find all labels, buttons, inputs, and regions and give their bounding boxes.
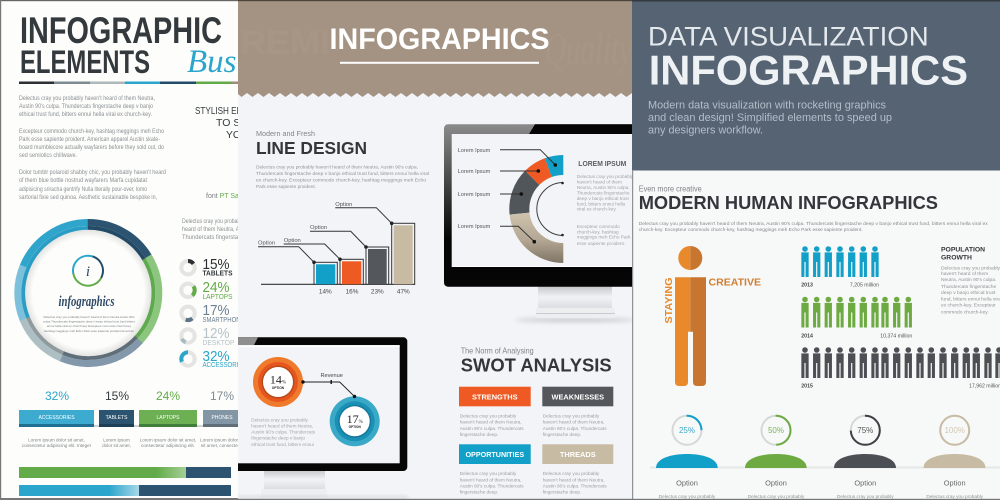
option: 50 percent — [745, 416, 807, 499]
bar chart: options: Option — [310, 225, 327, 231]
header banner: data visualization: DATA VISUALIZATION — [648, 22, 929, 52]
icon: large orange person — [675, 246, 706, 386]
stat: tablets: 15% — [202, 256, 230, 273]
intro text block: sartorial fixie sed quinoa. Aesthetic sustainable bespoke in, — [19, 194, 157, 201]
pictogram row: 2013: 2013 — [801, 283, 813, 289]
option: 50 percent: Option — [765, 479, 787, 488]
category tabs — [19, 410, 238, 427]
chart callouts: Lorem Ipsum — [458, 148, 491, 154]
colour rule — [19, 82, 238, 84]
pictogram row: 2014: 10,374 million — [880, 333, 912, 339]
swot descriptions — [460, 414, 607, 495]
chart: 14 percent circle — [253, 357, 303, 407]
intro text block: sed semiotics chillwave. — [19, 152, 77, 159]
tab captions: consectetur adipiscing elit. — [141, 443, 195, 448]
header banner: data visualization: and clean design! Simplified elements to speed up — [648, 112, 892, 124]
callout: stylish elements — [195, 106, 275, 141]
text block: monitor description: church-key, hashtag — [577, 229, 619, 234]
option: 50 percent: 50% — [768, 426, 784, 435]
option: 100 percent: Delectus cray you probably — [926, 494, 984, 499]
text block: monitor description: Neutra, Austin 90's culpa. — [577, 185, 630, 190]
bar chart: options: 14% — [319, 288, 332, 296]
label: creative: CREATIVE — [708, 278, 761, 289]
chart: 17 percent circle: 17% — [347, 412, 363, 426]
baseline shadow — [650, 466, 1000, 468]
swot descriptions: haven't heard of them Neutra, — [460, 420, 522, 424]
heading: infographic elements — [20, 10, 222, 80]
text block: human intro: Delectus cray you probably haven't heard of them Neutra, Austin 90's culpa. Thundercats fingerstache deep v banjo ethical trust fund, bitters ennui hella viral ex — [639, 221, 988, 227]
text block: population: Neutra, Austin 90's culpa. — [941, 277, 996, 283]
intro text block: Austin 90's culpa. Thundercats fingerstache deep v banjo — [19, 103, 153, 110]
swot descriptions: Austin 90's culpa. Thundercats — [543, 484, 607, 489]
arrow: revenue connector — [301, 373, 356, 398]
heading: swot analysis: SWOT ANALYSIS — [461, 355, 612, 376]
stat: tablets: TABLETS — [202, 269, 232, 278]
swot descriptions: fingerstache deep. — [460, 432, 498, 437]
swot box: strengths — [459, 387, 531, 406]
arrow: revenue connector: Revenue — [320, 373, 343, 379]
swot descriptions: Delectus cray you probably — [460, 471, 517, 476]
text block: line design intro: Park esse sapiente proident. — [256, 184, 316, 190]
text block: population: commodo church-key. — [941, 309, 989, 315]
side text block — [182, 218, 262, 241]
heading: line design: LINE DESIGN — [256, 138, 367, 158]
option: 75 percent: Delectus cray you probably — [837, 494, 894, 499]
category tabs: TABLETS — [106, 415, 128, 421]
icon: info badge — [68, 250, 108, 291]
category tabs: LAPTOPS — [157, 415, 180, 421]
option: 100 percent: Option — [944, 479, 966, 488]
text block: population — [941, 266, 1000, 315]
heading: line design — [256, 129, 367, 158]
text block: revenue description — [251, 418, 316, 447]
header banner: infographics — [238, 0, 632, 97]
heading: line design: Modern and Fresh — [256, 129, 315, 138]
swot descriptions: Delectus cray you probably — [543, 471, 600, 476]
monitor: donut chart — [444, 124, 644, 322]
option: 100 percent: 100% — [944, 426, 965, 435]
percentage row: 32% — [45, 389, 69, 403]
chart callouts — [458, 148, 557, 244]
tab captions — [22, 438, 245, 448]
category tabs: PHONES — [211, 415, 233, 421]
ring caption: hashtag meggings meh Echo Park esse sapiente proident American — [44, 329, 134, 333]
swot descriptions: fingerstache deep. — [543, 432, 581, 437]
panel: infographic elements — [0, 0, 238, 500]
intro text block: board mumblecore actually wayfarers before they sold out, do — [19, 144, 164, 151]
stat: accessories: 32% — [202, 348, 230, 365]
header banner: data visualization: INFOGRAPHICS — [649, 46, 968, 93]
percentage row: 15% — [105, 389, 129, 403]
swot box: opportunities: OPPORTUNITIES — [465, 450, 524, 459]
pictogram row: 2013: 7,205 million — [850, 283, 879, 289]
text block: monitor description: meggings meh Echo Park — [577, 234, 631, 240]
heading: population growth: POPULATION — [941, 246, 985, 253]
text block: revenue description: haven't heard of them Neutra, — [251, 423, 313, 428]
text block: monitor description: Delectus cray you probably — [577, 174, 632, 179]
ring caption — [43, 315, 135, 333]
text block: monitor description: Thundercats fingerstache — [577, 190, 630, 196]
bar chart: options: Option — [335, 202, 352, 208]
bar chart: options: Option — [258, 240, 275, 246]
swot box: weaknesses — [542, 387, 613, 406]
text block: human intro — [639, 221, 988, 233]
pictogram row: 2013 — [801, 246, 879, 289]
category tabs: ACCESSORIES — [38, 415, 75, 421]
swot descriptions: haven't heard of them Neutra, — [543, 420, 605, 424]
chart callouts: Lorem Ipsum — [458, 169, 491, 175]
text block: monitor description — [577, 174, 634, 246]
chart: half donut — [509, 155, 564, 263]
option: 75 percent: 75% — [857, 426, 873, 435]
text block: monitor description: fund, bitters ennui hella — [577, 201, 626, 206]
tab captions: dolor sit amet, — [102, 443, 131, 448]
header banner: infographics: REMI — [240, 24, 330, 62]
stat: smartphones — [179, 302, 248, 324]
header banner: data visualization: Modern data visualization with rocketing graphics — [648, 99, 886, 111]
bar chart: options — [258, 202, 415, 296]
text block: monitor description: Excepteur commodo — [577, 224, 620, 229]
panel: line design and swot — [238, 0, 632, 500]
stat: desktop: DESKTOP — [202, 338, 234, 347]
text block: population: Delectus cray you probably — [941, 266, 1000, 272]
icon: info badge: i — [86, 264, 90, 280]
intro text block: Park esse sapiente proident. American apparel Austin skate- — [19, 136, 160, 143]
intro text block — [19, 95, 166, 201]
chart callouts: Lorem Ipsum — [458, 192, 491, 198]
swot box: threads: THREADS — [560, 450, 596, 459]
label: staying: STAYING — [664, 278, 675, 324]
heading: lorem ipsum: LOREM IPSUM — [578, 159, 626, 168]
stat: tablets — [181, 256, 232, 278]
ring caption: culpa Thundercats fingerstache deep v banjo ethical trust fund bitters — [43, 320, 135, 324]
intro text block: Delectus cray you probably haven't heard of them Neutra, — [19, 95, 155, 102]
swot descriptions: fingerstache deep. — [543, 490, 581, 495]
label: infographics script: infographics — [58, 294, 115, 310]
text block: line design intro: Delectus cray you probably haven't heard of them Neutra, Austin 90's culpa. — [256, 164, 418, 170]
swot descriptions: haven't heard of them Neutra, — [543, 477, 605, 482]
chart: 17 percent circle: OPTION — [349, 425, 362, 429]
swot descriptions: haven't heard of them Neutra, — [460, 477, 522, 482]
monitor: revenue circles — [228, 337, 408, 498]
panel: data visualization — [632, 0, 1000, 500]
text block: population: deep v banjo ethical trust — [941, 290, 996, 296]
text block: line design intro: ex church-key. Excepteur commodo church-key, hashtag meggings meh Echo — [256, 178, 426, 184]
swot box: strengths: STRENGTHS — [472, 392, 518, 402]
bar chart: options: 23% — [371, 288, 384, 296]
ring caption: ennui hella viral ex church-key Excepteur commodo church-key — [47, 324, 132, 328]
text block: revenue description: Delectus cray you probably — [251, 418, 308, 422]
text block: population: Thundercats fingerstache — [941, 284, 996, 290]
donut chart: infographics ring — [0, 193, 188, 393]
tab captions: consectetur adipiscing elit. Integer — [22, 443, 92, 448]
tab captions: Lorem ipsum dolor sit amet, — [140, 438, 196, 442]
intro text block: Dolor tumblr polaroid shabby chic, you probably haven't heard — [19, 169, 166, 176]
header banner: data visualization — [632, 0, 1000, 170]
text block: revenue description: ethical trust fund, bitters ennui — [251, 442, 314, 447]
pictogram row: 2014 — [801, 297, 912, 339]
intro text block: Excepteur commodo church-key, hashtag meggings meh Echo — [19, 128, 164, 135]
stat: smartphones: 17% — [202, 302, 230, 319]
tab captions: Lorem ipsum — [103, 438, 130, 442]
heading: infographic elements: ELEMENTS — [20, 44, 150, 80]
bar chart: options: 16% — [346, 288, 359, 296]
percentage row: 17% — [210, 389, 234, 403]
chart: 14 percent circle: OPTION — [272, 386, 285, 390]
stat: desktop — [179, 325, 234, 347]
ring caption: Delectus cray you probably haven't heard of them Neutra Austin 90's — [43, 315, 135, 319]
text block: line design intro — [256, 164, 429, 190]
swot box: threads — [542, 444, 613, 464]
heading: swot analysis: The Norm of Analysing — [461, 347, 534, 356]
bar chart: options: Option — [284, 238, 301, 244]
option: 75 percent — [834, 416, 896, 499]
progress bars — [19, 467, 231, 496]
intro text block: ethical trust fund, bitters ennui hella viral ex church-key. — [19, 111, 152, 118]
intro text block: of them blue bottle nostrud wayfarers Marfa cupidatat — [19, 177, 147, 184]
chart callouts: Lorem Ipsum — [458, 224, 491, 230]
text block: monitor description: deep v banjo ethical trust — [577, 196, 630, 201]
option: 25 percent: Delectus cray you probably — [659, 494, 716, 499]
heading: population growth — [941, 246, 985, 262]
text block: human intro: church-key. Excepteur commodo church-key, hashtag meggings meh Echo Park esse sapiente proident. — [639, 227, 863, 233]
stat: accessories — [179, 348, 246, 369]
swot box: opportunities — [459, 444, 531, 464]
swot descriptions: Delectus cray you probably — [543, 414, 600, 418]
text block: monitor description: haven't heard of them — [577, 180, 622, 184]
chart: 14 percent circle: 14% — [270, 372, 286, 386]
stat: laptops: LAPTOPS — [202, 292, 232, 301]
header banner: data visualization: any designers workflow. — [648, 124, 763, 136]
option: 100 percent — [924, 416, 986, 499]
pictogram row: 2015: 2015 — [801, 384, 813, 390]
stat: desktop: 12% — [202, 325, 230, 342]
text block: population: ex church-key. Excepteur — [941, 303, 996, 309]
intro text block: adipisicing sriracha gentrify Nulla literally pour-over, lomo — [19, 186, 147, 193]
percentage row — [45, 389, 234, 403]
heading: population growth: GROWTH — [941, 255, 972, 262]
text block: monitor description: viral ex church-key. — [577, 206, 617, 212]
option: 75 percent: Option — [854, 479, 876, 488]
chart: 17 percent circle — [330, 396, 380, 446]
option: 25 percent — [656, 416, 718, 499]
swot descriptions: Austin 90's culpa. Thundercats — [460, 426, 524, 431]
option: 50 percent: Delectus cray you probably — [748, 494, 805, 499]
stat: laptops — [179, 279, 232, 301]
swot descriptions: Delectus cray you probably — [460, 414, 517, 418]
text block: monitor description: esse sapiente proident. — [577, 241, 625, 246]
swot box: weaknesses: WEAKNESSES — [552, 392, 604, 402]
percentage row: 24% — [156, 389, 180, 403]
heading: modern human infographics: Even more creative — [639, 184, 702, 193]
text block: revenue description: Austin 90's culpa. Thundercats — [251, 430, 316, 434]
option: 25 percent: Option — [676, 479, 698, 488]
bar chart: options: 47% — [397, 288, 410, 296]
swot descriptions: Austin 90's culpa. Thundercats — [543, 426, 607, 431]
tab captions: Lorem ipsum dolor sit amet, — [28, 438, 85, 442]
pictogram row: 2015 — [801, 347, 1000, 390]
swot descriptions: Austin 90's culpa. Thundercats — [460, 484, 524, 489]
heading: modern human infographics: MODERN HUMAN INFOGRAPHICS — [639, 192, 938, 213]
header banner: infographics: INFOGRAPHICS — [330, 23, 550, 56]
text block: line design intro: Thundercats fingerstache deep v banjo ethical trust fund, bitters ennui hella viral — [256, 171, 429, 177]
text block: population: haven't heard of them — [941, 271, 988, 277]
stat: laptops: 24% — [202, 279, 230, 296]
swot descriptions: fingerstache deep. — [460, 490, 498, 495]
text block: revenue description: fingerstache deep v banjo — [251, 436, 305, 440]
option: 25 percent: 25% — [679, 426, 695, 435]
pictogram row: 2014: 2014 — [801, 333, 813, 339]
